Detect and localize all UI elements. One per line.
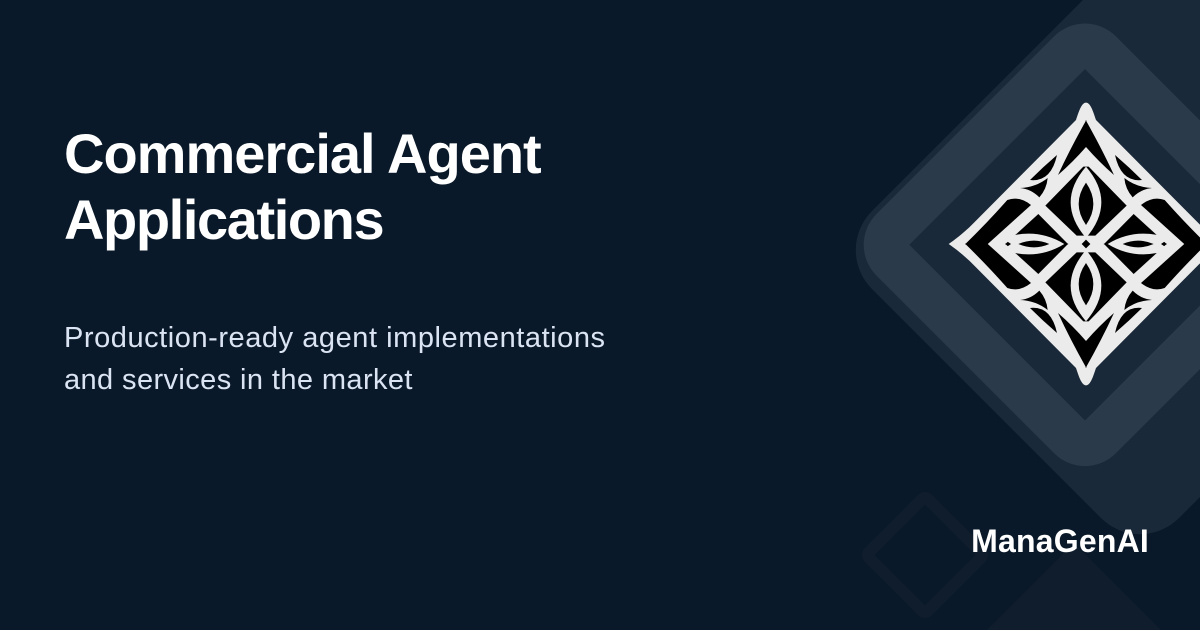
brand name: ManaGenAI [971, 523, 1149, 559]
small diamond outline [866, 496, 984, 614]
background diamonds and logo artwork [856, 0, 1200, 534]
title: Applications [64, 188, 383, 251]
diamond ring outline [864, 24, 1200, 466]
large filled diamond [856, 0, 1200, 534]
logo emblem [949, 103, 1200, 385]
bottom diamond [987, 547, 1161, 630]
subtitle [64, 322, 606, 396]
subtitle: Production-ready agent implementations [64, 322, 606, 354]
title [64, 122, 541, 251]
title: Commercial Agent [64, 122, 541, 185]
subtitle: and services in the market [64, 364, 413, 396]
